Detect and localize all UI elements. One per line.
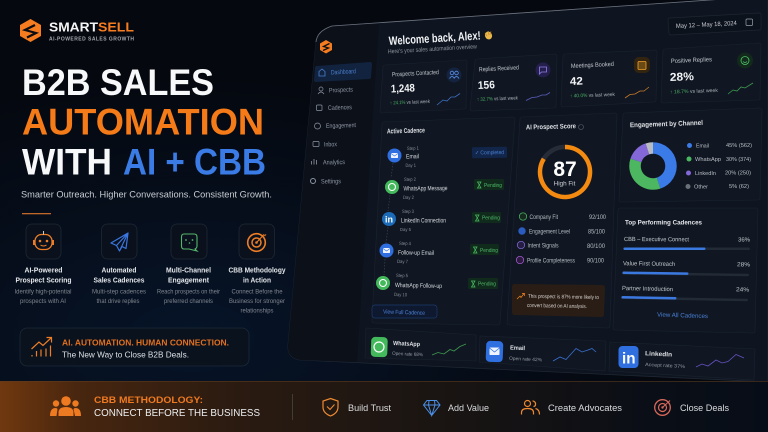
channel card: email: Email xyxy=(510,346,525,352)
step 5 whatsapp follow-up: Step 5 xyxy=(396,273,408,279)
stat card: prospects contacted xyxy=(380,60,467,113)
stat card: meetings booked xyxy=(561,50,657,107)
channel card: email: Open rate 42% xyxy=(509,356,543,363)
brand logo: SMART xyxy=(49,20,98,34)
nav: inbox: Inbox xyxy=(324,141,338,148)
feature: automated sales cadences: Multi-step cadences xyxy=(92,290,146,296)
step 2 whatsapp: WhatsApp Message xyxy=(403,185,448,192)
channel card: whatsapp: WhatsApp xyxy=(393,341,420,348)
panel: engagement by channel xyxy=(619,108,762,202)
feature: AI-powered prospect scoring: Identify high-potential xyxy=(14,290,72,296)
brand logo: AI-POWERED SALES GROWTH xyxy=(49,36,134,42)
feature: automated sales cadences: Automated xyxy=(102,266,136,274)
item: add value: Add Value xyxy=(448,403,489,413)
badge: pending xyxy=(474,179,504,190)
nav: cadences: Cadences xyxy=(328,104,353,112)
panel: top performing cadences: Top Performing Cadences xyxy=(625,220,702,226)
footer band: CBB METHODOLOGY: xyxy=(94,395,203,406)
feature: automated sales cadences: Sales Cadences xyxy=(94,276,144,284)
headline: B2B SALES xyxy=(22,61,214,103)
callout: AI automation human connection: The New Way to Close B2B Deals. xyxy=(62,350,189,360)
step 3 linkedin: in xyxy=(385,214,393,224)
step 4 follow-up email xyxy=(380,241,434,265)
callout: conversion insight xyxy=(512,284,605,317)
step 1 email: Day 1 xyxy=(405,163,416,169)
item: create advocates: Create Advocates xyxy=(548,403,623,413)
icon: hex S xyxy=(20,19,41,42)
feature: multi-channel engagement: preferred channels xyxy=(164,299,213,305)
channel card: email xyxy=(479,336,606,371)
step 5 whatsapp follow-up: Day 10 xyxy=(394,292,407,298)
step 4 follow-up email: Day 7 xyxy=(397,259,408,265)
badge: pending xyxy=(472,212,501,223)
panel: AI prospect score xyxy=(507,113,617,328)
step 4 follow-up email: Follow-up Email xyxy=(398,250,434,257)
badge: pending: Pending xyxy=(480,248,498,254)
legend: 30% (374) xyxy=(726,157,751,163)
gauge: score 87: High Fit xyxy=(554,180,576,188)
step 3 linkedin: LinkedIn Connection xyxy=(401,218,446,224)
legend: 5% (62) xyxy=(729,184,749,190)
stat card: meetings booked: 42 xyxy=(570,75,583,88)
brand logo: SELL xyxy=(98,20,134,34)
stat card: meetings booked: Meetings Booked xyxy=(571,61,615,70)
step 2 whatsapp xyxy=(385,177,448,201)
feature: CBB methodology in action xyxy=(228,224,286,314)
step 1 email xyxy=(388,146,419,169)
metric: engagement level: 85/100 xyxy=(588,230,606,236)
stat card: prospects contacted: Prospects Contacted xyxy=(392,69,439,78)
link: view all cadences: View All Cadences xyxy=(657,312,708,320)
step 3 linkedin: Day 5 xyxy=(400,227,411,233)
icon: target xyxy=(239,224,274,259)
feature: AI-powered prospect scoring xyxy=(14,224,72,305)
icon: paper plane xyxy=(102,224,137,259)
icon: people xyxy=(50,396,81,416)
stat card: positive replies: Positive Replies xyxy=(671,56,712,65)
stat card: replies received: ↑ 32.7% vs last week xyxy=(477,95,518,103)
step 5 whatsapp follow-up xyxy=(376,273,443,298)
channel card: whatsapp: Open rate 68% xyxy=(392,351,424,358)
date picker xyxy=(668,13,761,35)
icon: prospects xyxy=(446,68,462,82)
step 4 follow-up email: Step 4 xyxy=(399,241,411,247)
icon: linkedin: in xyxy=(622,350,636,368)
nav: prospects: Prospects xyxy=(329,86,354,94)
icon: chat bubble xyxy=(171,224,207,259)
stat card: replies received: Replies Received xyxy=(479,64,520,73)
feature: multi-channel engagement: Multi-Channel xyxy=(166,266,211,274)
footer band: CONNECT BEFORE THE BUSINESS xyxy=(94,408,260,419)
icon: calendar xyxy=(634,57,650,73)
step 1 email: Email xyxy=(406,153,419,160)
badge: pending xyxy=(468,278,498,289)
callout: AI automation human connection: AI. AUTOMATION. HUMAN CONNECTION. xyxy=(62,338,229,348)
legend xyxy=(686,143,752,190)
metric: company fit: 92/100 xyxy=(589,215,607,221)
panel: active cadence: Active Cadence xyxy=(387,127,425,135)
footer band xyxy=(0,381,768,432)
headline: WITH xyxy=(22,140,112,182)
metric: intent signals: 80/100 xyxy=(587,244,606,250)
icon: email xyxy=(486,341,503,362)
panel: AI prospect score: AI Prospect Score xyxy=(526,123,576,131)
step 2 whatsapp: Step 2 xyxy=(404,177,416,183)
nav: settings: Settings xyxy=(321,178,342,185)
legend: Other xyxy=(694,184,708,190)
row: CBB executive connect xyxy=(623,237,751,250)
button: view full cadence: View Full Cadence xyxy=(383,310,425,317)
channel card: linkedin: Accept rate 37% xyxy=(645,362,686,370)
metric: profile completeness xyxy=(516,256,605,264)
welcome heading xyxy=(388,28,493,55)
item: add value xyxy=(424,400,489,416)
row: CBB executive connect: 36% xyxy=(738,238,751,244)
feature: CBB methodology in action: relationships xyxy=(240,308,274,314)
panel: engagement by channel: Engagement by Channel xyxy=(630,120,703,129)
metric: intent signals: Intent Signals xyxy=(528,244,558,250)
icon: growth chart xyxy=(32,338,52,356)
welcome heading: Here's your sales automation overview xyxy=(388,43,477,55)
feature: automated sales cadences: that drive replies xyxy=(96,299,140,305)
channel card: linkedin xyxy=(609,342,755,380)
nav: engagement: Engagement xyxy=(326,122,356,130)
stat card: positive replies xyxy=(661,43,761,103)
stat card: replies received xyxy=(470,54,557,111)
stat card: replies received: 156 xyxy=(478,79,495,92)
legend: 20% (250) xyxy=(725,170,751,176)
item: build trust xyxy=(323,398,391,416)
date picker: May 12 – May 18, 2024 xyxy=(676,20,738,30)
feature: CBB methodology in action: CBB Methodology xyxy=(228,266,286,274)
feature: CBB methodology in action: Connect Before the xyxy=(232,290,283,296)
legend: WhatsApp xyxy=(695,157,721,163)
item: close deals: Close Deals xyxy=(680,403,729,413)
stat card: prospects contacted: ↑ 24.1% vs last week xyxy=(390,99,430,106)
icon: linkedin xyxy=(618,346,638,368)
row: partner introduction: Partner Introduction xyxy=(622,286,673,293)
badge: pending: Pending xyxy=(484,183,502,189)
welcome heading: Welcome back, Alex! xyxy=(388,28,481,48)
item: close deals xyxy=(655,400,729,415)
row: partner introduction: 24% xyxy=(736,287,750,294)
dashboard logo xyxy=(320,40,332,54)
gauge: score 87: 87 xyxy=(553,158,577,181)
legend: 45% (562) xyxy=(726,143,752,149)
metric: engagement level: Engagement Level xyxy=(529,229,570,235)
step 3 linkedin: Step 3 xyxy=(402,209,414,215)
stat card: positive replies: ↑ 18.7% vs last week xyxy=(670,88,719,95)
metric: company fit xyxy=(519,213,607,221)
step 1 email: Step 1 xyxy=(407,146,419,152)
step 3 linkedin xyxy=(382,209,446,233)
metric: company fit: Company Fit xyxy=(530,215,558,221)
button: view full cadence xyxy=(372,305,437,318)
row: value first outreach: Value First Outreach xyxy=(623,261,675,268)
step 2 whatsapp: Day 2 xyxy=(403,195,414,201)
nav active: dashboard: Dashboard xyxy=(331,68,356,76)
stat card: prospects contacted: 1,248 xyxy=(391,82,415,95)
legend: Email xyxy=(696,144,709,150)
panel body xyxy=(288,0,768,382)
headline xyxy=(22,61,266,182)
feature: AI-powered prospect scoring: AI-Powered xyxy=(24,266,62,274)
sidebar navigation xyxy=(310,62,372,185)
metric: engagement level xyxy=(518,227,606,236)
headline: AUTOMATION xyxy=(22,100,264,142)
badge: completed: ✓ Completed xyxy=(475,150,504,156)
badge: pending: Pending xyxy=(482,216,500,222)
row: value first outreach xyxy=(622,261,751,276)
stat card: meetings booked: ↑ 40.0% vs last week xyxy=(570,92,616,99)
feature: multi-channel engagement: Reach prospects on their xyxy=(157,290,220,296)
stat card: positive replies: 28% xyxy=(670,71,694,84)
feature: CBB methodology in action: Business for stronger xyxy=(229,299,285,305)
icon: whatsapp xyxy=(371,337,388,357)
icon: waving hand xyxy=(484,30,493,41)
row: partner introduction xyxy=(621,286,750,301)
panel: active cadence xyxy=(372,117,515,325)
icon: replies xyxy=(536,62,550,78)
legend: LinkedIn xyxy=(695,171,716,177)
panel: top performing cadences xyxy=(613,208,758,333)
feature: AI-powered prospect scoring: prospects with AI xyxy=(20,299,66,305)
feature: automated sales cadences xyxy=(92,224,146,305)
metric: profile completeness: Profile Completeness xyxy=(527,258,575,264)
dashboard panel xyxy=(288,0,768,382)
feature: multi-channel engagement: Engagement xyxy=(168,276,210,284)
feature: CBB methodology in action: in Action xyxy=(243,276,271,284)
icon: robot xyxy=(26,224,61,259)
callout: conversion insight: convert based on AI analysis. xyxy=(527,303,587,310)
callout: conversion insight: This prospect is 87% more likely to xyxy=(528,294,599,301)
channel card: linkedin: LinkedIn xyxy=(645,350,672,359)
row: value first outreach: 28% xyxy=(737,262,751,268)
item: build trust: Build Trust xyxy=(348,403,391,413)
metric: profile completeness: 90/100 xyxy=(587,258,605,264)
badge: pending xyxy=(470,244,499,255)
nav: analytics: Analytics xyxy=(323,159,346,166)
row: CBB executive connect: CBB – Executive Connect xyxy=(624,237,689,243)
badge: completed xyxy=(472,147,507,158)
metric: intent signals xyxy=(517,241,606,250)
feature: multi-channel engagement xyxy=(157,224,220,305)
item: create advocates xyxy=(522,400,623,414)
donut chart xyxy=(635,148,671,184)
callout: AI automation human connection xyxy=(20,328,249,366)
headline: AI + CBB xyxy=(123,140,266,182)
channel card: whatsapp xyxy=(365,328,476,361)
badge: pending: Pending xyxy=(478,282,496,288)
icon: smile xyxy=(737,52,753,68)
step 5 whatsapp follow-up: WhatsApp Follow-up xyxy=(395,282,443,290)
brand logo xyxy=(20,19,134,42)
gauge: score 87 xyxy=(540,147,590,197)
subtitle: Smarter Outreach. Higher Conversations. Consistent Growth. xyxy=(21,190,272,200)
sidebar xyxy=(288,23,379,362)
feature: AI-powered prospect scoring: Prospect Scoring xyxy=(16,276,72,284)
